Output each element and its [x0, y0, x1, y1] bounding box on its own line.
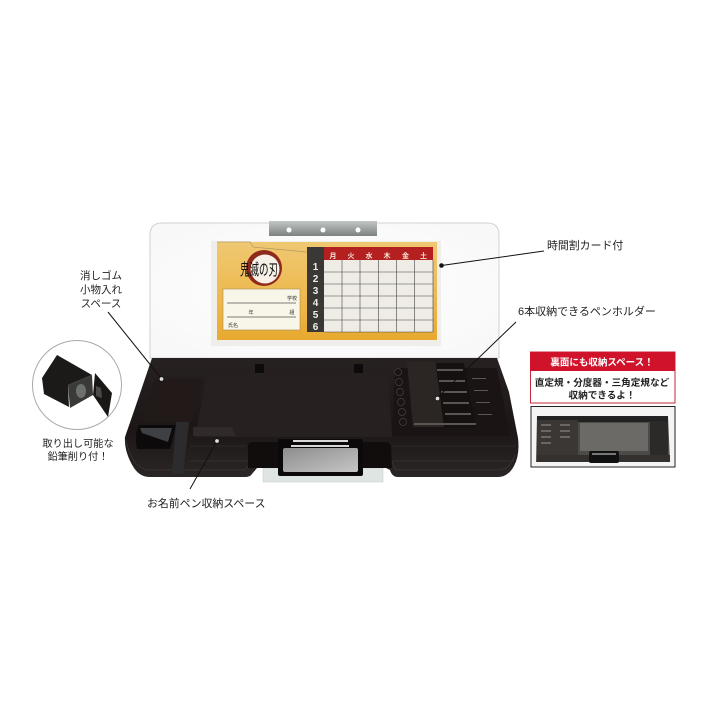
timetable grid: 4: [313, 298, 319, 309]
timetable grid: 土: [420, 251, 427, 260]
logo: Kimetsu no Yaiba: 鬼滅の刃: [240, 261, 278, 279]
callout: eraser compartment label: スペース: [81, 298, 121, 310]
timetable grid: 水: [366, 251, 372, 260]
eraser compartment: [142, 379, 204, 422]
timetable grid: 木: [384, 251, 390, 260]
name box: 学校: [287, 295, 297, 302]
callout: back side storage: 収納できるよ！: [569, 390, 635, 402]
callout: eraser compartment label: 消しゴム: [80, 269, 122, 282]
logo: Kimetsu no Yaiba: [240, 250, 282, 286]
hinge plate: [269, 221, 377, 236]
callout: name pen compartment label: [147, 439, 266, 510]
panel: open lid: [150, 221, 499, 358]
clasp: [248, 439, 392, 476]
timetable grid: 3: [313, 286, 319, 297]
text: sharpener caption: 鉛筆削り付！: [47, 450, 109, 463]
sharpener slot: [136, 422, 189, 474]
silver strip under clasp: [263, 468, 383, 482]
panel: timetable card: [211, 241, 441, 346]
callout: timetable card label: [439, 239, 623, 268]
timetable grid: 5: [313, 310, 319, 321]
timetable grid: 火: [348, 252, 354, 260]
name box: 年: [248, 309, 254, 316]
pen holder: [392, 362, 510, 436]
callout: timetable card label: 時間割カード付: [547, 239, 623, 252]
callout: pen holder label: [435, 304, 656, 401]
timetable grid: 月: [330, 252, 336, 260]
callout: eraser compartment label: 小物入れ: [80, 283, 122, 296]
back rim slots: [255, 364, 264, 373]
timetable grid: 1: [313, 262, 319, 273]
callout: back side storage: 直定規・分度器・三角定規など: [535, 377, 670, 389]
panel: back side photo: [531, 406, 675, 467]
text: sharpener caption: 取り出し可能な: [42, 437, 114, 450]
timetable grid: 2: [313, 274, 319, 285]
text: sharpener caption: [42, 437, 114, 463]
name box: [223, 289, 300, 330]
timetable grid: 6: [313, 322, 319, 333]
callout: back side storage: [530, 352, 675, 403]
name box: 氏名: [228, 322, 238, 329]
callout: eraser compartment label: [80, 269, 164, 381]
timetable grid: 金: [402, 251, 409, 260]
callout: back side storage: 裏面にも収納スペース！: [550, 356, 654, 368]
panel: pencil case body: [125, 358, 518, 482]
callout: pen holder label: 6本収納できるペンホルダー: [518, 304, 656, 318]
center tray: [195, 373, 392, 437]
name box: 組: [289, 309, 295, 316]
icon: removable pencil sharpener detail: [32, 340, 122, 430]
callout: name pen compartment label: お名前ペン収納スペース: [147, 496, 266, 510]
timetable grid: [307, 247, 433, 333]
